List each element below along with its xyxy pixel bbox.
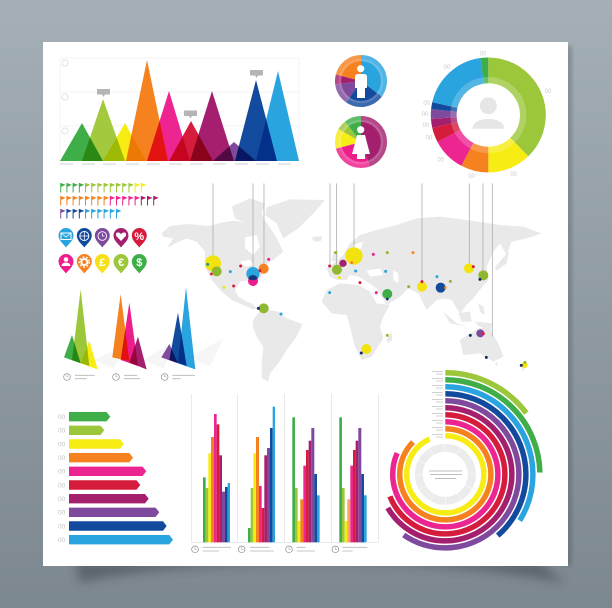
donut labels: 00 bbox=[545, 89, 552, 95]
mountain area chart bbox=[60, 58, 299, 164]
icon: gear pin bbox=[77, 254, 92, 274]
spiral arcs bbox=[344, 373, 547, 576]
icon: dollar pin: $ bbox=[136, 257, 142, 269]
icon: woman bbox=[352, 126, 370, 159]
mini triangle chart 1 bbox=[64, 289, 133, 380]
donut labels: 00 bbox=[426, 136, 433, 142]
donut labels: 00 bbox=[437, 158, 445, 164]
donut labels: 00 bbox=[480, 52, 487, 58]
horizontal arrow bars bbox=[58, 412, 173, 544]
callout bbox=[184, 110, 197, 118]
clock bbox=[113, 374, 140, 380]
icon: heart pin bbox=[114, 228, 128, 248]
bar labels: 00 bbox=[58, 414, 66, 421]
bar group 3 bbox=[292, 417, 320, 542]
bar labels: 00 bbox=[58, 441, 66, 448]
donut labels: 00 bbox=[510, 172, 518, 178]
bar group 2 bbox=[248, 407, 275, 542]
donut labels: 00 bbox=[423, 101, 431, 107]
icon: person pin bbox=[58, 254, 74, 274]
donut labels: 00 bbox=[468, 174, 476, 180]
spiral radial chart bbox=[344, 372, 547, 576]
mini triangle chart 2 bbox=[112, 294, 177, 380]
pin lines bbox=[213, 183, 492, 337]
icon: clock pin bbox=[95, 228, 110, 248]
large donut chart bbox=[422, 52, 552, 180]
donut labels: 00 bbox=[444, 65, 451, 71]
inner grey ring bbox=[419, 448, 472, 501]
donut labels: 00 bbox=[423, 123, 430, 129]
world map bbox=[162, 183, 542, 382]
bar labels: 00 bbox=[58, 482, 66, 489]
icon: mail pin bbox=[58, 228, 74, 248]
icon: man bbox=[355, 65, 367, 98]
centre caption bbox=[429, 471, 462, 478]
icon: pound pin: £ bbox=[99, 257, 105, 269]
bar labels: 00 bbox=[58, 428, 66, 435]
donut labels: 00 bbox=[422, 112, 429, 118]
callout bbox=[250, 70, 263, 78]
bar labels: 00 bbox=[58, 537, 66, 544]
bar group 1 bbox=[203, 414, 230, 542]
icon: globe pin bbox=[77, 228, 92, 248]
clock bbox=[64, 374, 95, 380]
bar labels: 00 bbox=[58, 510, 66, 517]
map pins bbox=[58, 228, 147, 274]
flags bbox=[61, 183, 159, 218]
arc labels bbox=[432, 372, 443, 437]
inland seas bbox=[240, 235, 398, 283]
female donut bbox=[338, 119, 384, 165]
icon: user bbox=[472, 97, 504, 129]
callout bbox=[97, 89, 110, 97]
mini triangle chart 3 bbox=[161, 287, 223, 380]
paper shadow bbox=[75, 46, 572, 583]
bar labels: 00 bbox=[58, 523, 66, 530]
continents bbox=[162, 198, 542, 382]
bar captions bbox=[192, 546, 367, 553]
icon: percent pin: % bbox=[134, 231, 144, 243]
donut labels bbox=[422, 52, 552, 180]
male donut bbox=[338, 58, 384, 104]
vertical bar charts bbox=[191, 394, 378, 553]
clock bbox=[161, 374, 195, 380]
small dots bbox=[206, 251, 526, 367]
bar labels: 00 bbox=[58, 469, 66, 476]
data bubbles bbox=[205, 247, 528, 368]
bar labels bbox=[58, 414, 66, 544]
paper sheet bbox=[43, 42, 568, 566]
bar group 4 bbox=[339, 417, 367, 542]
bar labels: 00 bbox=[58, 496, 66, 503]
icon: euro pin: € bbox=[118, 257, 124, 269]
bar labels: 00 bbox=[58, 455, 66, 462]
